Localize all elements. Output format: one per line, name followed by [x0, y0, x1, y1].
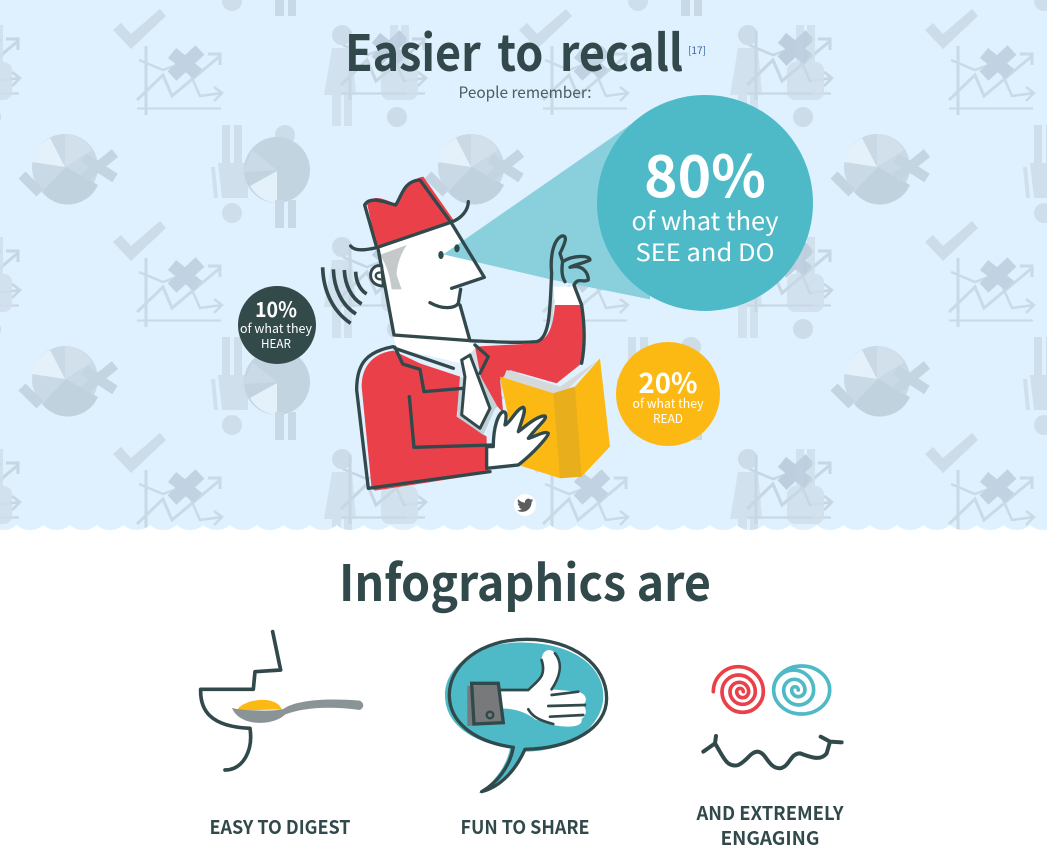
hand holding book	[487, 407, 548, 468]
hat	[367, 177, 454, 247]
label: fun to share: FUN TO SHARE	[460, 813, 590, 840]
red jacket	[362, 351, 492, 491]
callout: 80 percent	[597, 95, 813, 311]
ear	[371, 266, 383, 286]
callout: 80 percent: SEE and DO	[636, 233, 774, 268]
icon: thumbs up speech bubble	[445, 639, 607, 793]
outlines	[351, 180, 590, 488]
callout: 20 percent: of what they	[632, 393, 704, 412]
callout: 10 percent: of what they	[240, 318, 312, 337]
citation: [17]	[688, 42, 706, 57]
callout: 20 percent: READ	[653, 410, 683, 427]
icon: sound waves	[323, 267, 367, 323]
tie	[457, 362, 497, 435]
red arm	[475, 305, 584, 413]
callout: 80 percent: of what they	[632, 202, 778, 238]
callout: 20 percent: 20%	[638, 362, 698, 402]
shirt collar	[393, 337, 477, 363]
eyes	[438, 244, 460, 259]
hair	[379, 245, 407, 289]
callout: 10 percent: 10%	[255, 294, 297, 324]
label: and extremely engaging: ENGAGING	[720, 824, 820, 851]
label: and extremely engaging: AND EXTREMELY	[696, 799, 844, 826]
icon: dizzy spirals and wavy mouth	[703, 666, 842, 768]
gaze beam	[443, 118, 650, 299]
callout: 10 percent	[238, 286, 316, 364]
icon: mouth and spoon	[201, 632, 363, 770]
white forearm	[553, 287, 582, 305]
callout: 80 percent: 80%	[644, 130, 766, 214]
face	[377, 223, 485, 340]
book	[500, 358, 610, 478]
illustration: man with book	[323, 118, 650, 491]
callout: 10 percent: HEAR	[261, 335, 291, 352]
scalloped edge	[0, 523, 1047, 533]
heading: infographics are: Infographics are	[339, 544, 711, 616]
label: and extremely engaging	[696, 799, 844, 851]
subtitle: People remember:	[458, 81, 592, 103]
callout: 20 percent	[616, 342, 720, 446]
title: Easier to recall	[345, 14, 683, 86]
panel: patterned background	[0, 0, 1047, 532]
icon: twitter	[514, 494, 536, 516]
label: easy to digest: EASY TO DIGEST	[210, 813, 351, 840]
